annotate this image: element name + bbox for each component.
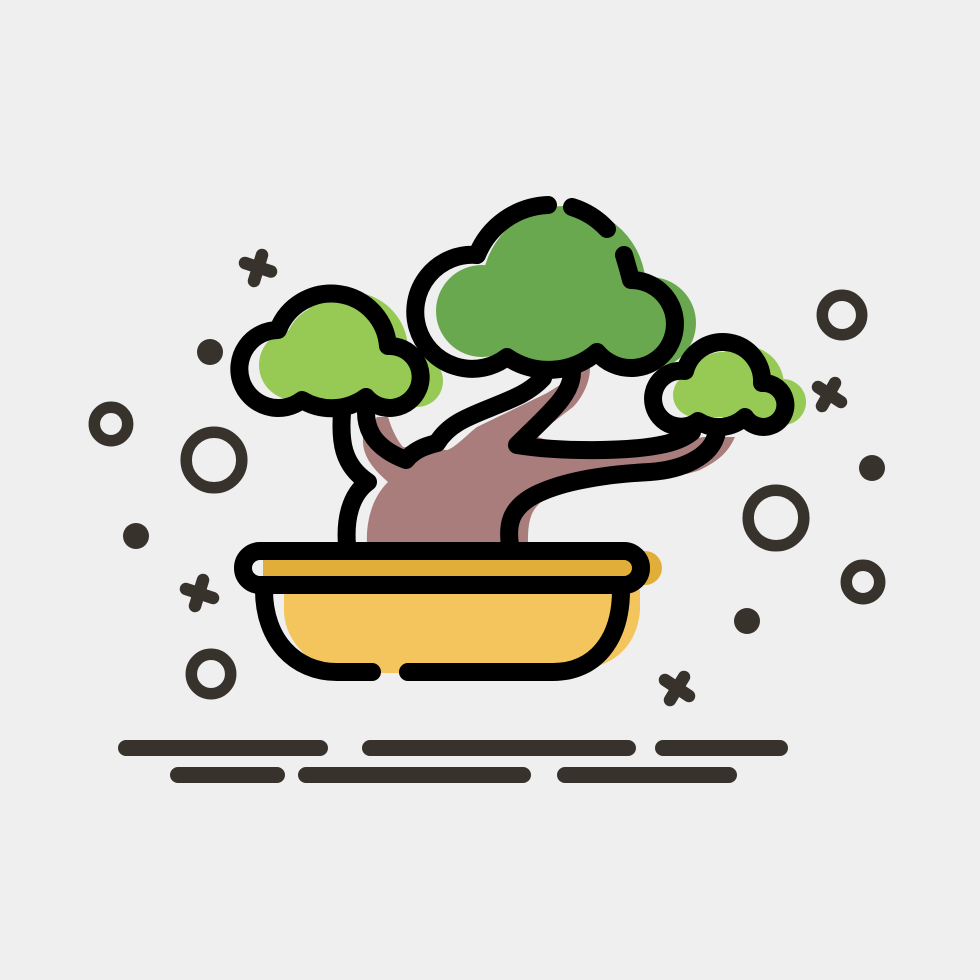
- right crown fill: [673, 346, 806, 425]
- outline: branch middle: [366, 378, 543, 460]
- left crown fill: [259, 292, 443, 408]
- pot rim fill: [263, 551, 662, 585]
- outline: pot rim: [243, 551, 641, 585]
- outline: branch left: [341, 413, 368, 545]
- trunk fill: [363, 368, 735, 545]
- decoration: rings: [94, 295, 880, 694]
- outline: branch lower right: [509, 432, 717, 545]
- outline: pot body: [264, 590, 621, 672]
- tree and pot outlines: [239, 205, 785, 672]
- outline: right crown: [653, 342, 785, 427]
- top crown fill: [436, 206, 696, 370]
- pot body fill: [284, 590, 640, 673]
- outline: top crown: [415, 205, 675, 370]
- ground lines: [126, 748, 780, 775]
- decoration: crosses: [186, 255, 841, 700]
- outline: branch upper right: [517, 372, 692, 450]
- outline: left crown: [239, 294, 421, 408]
- decoration: dots: [123, 339, 885, 634]
